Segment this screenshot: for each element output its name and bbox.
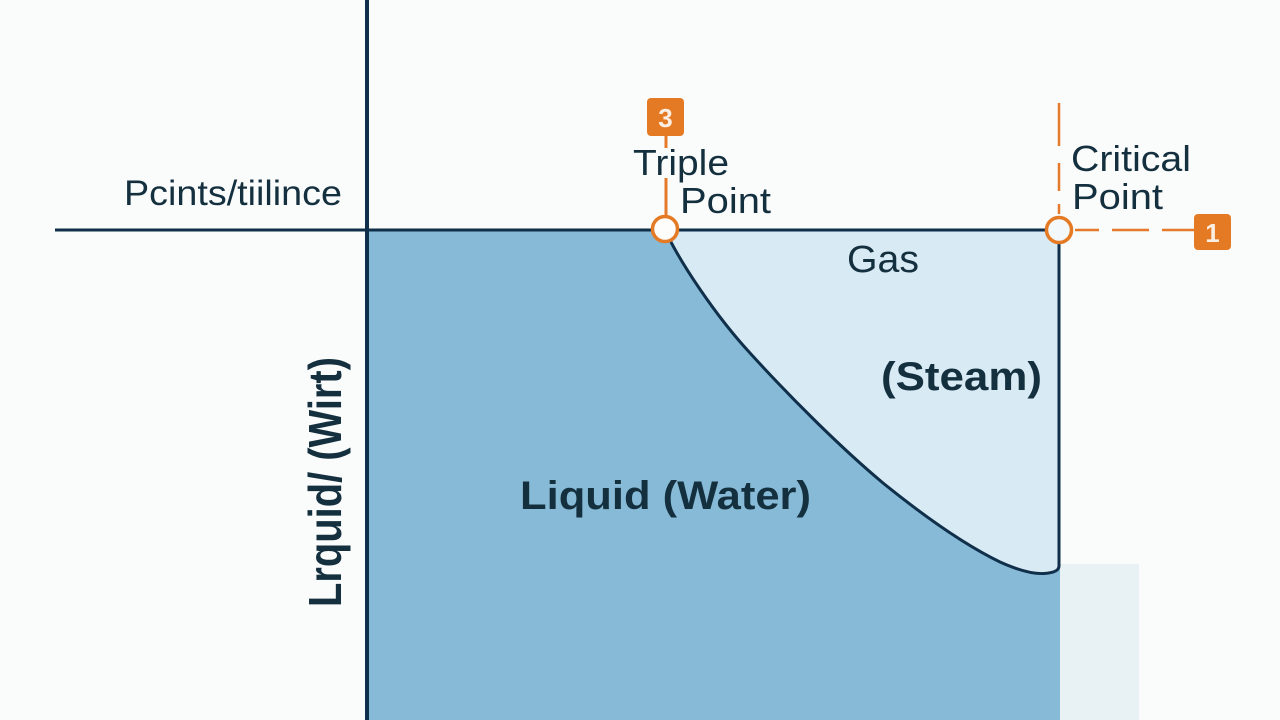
region: liquid xyxy=(367,230,1060,720)
phase boundary curve xyxy=(666,230,1059,574)
label: critical point: Critical xyxy=(1071,138,1191,179)
pale panel: lower right xyxy=(1060,564,1139,720)
axis label: horizontal: Pcints/tiilince xyxy=(124,174,342,213)
label: triple point: Point xyxy=(680,180,771,221)
label: gas: Gas xyxy=(847,239,919,281)
region: gas xyxy=(666,230,1059,574)
label: critical point: Point xyxy=(1072,176,1163,217)
label: steam: (Steam) xyxy=(881,355,1042,399)
critical point dashed leaders xyxy=(1059,103,1195,230)
badge: 3 xyxy=(647,98,684,136)
triple point marker xyxy=(647,98,684,242)
critical point marker xyxy=(1046,103,1231,250)
label: liquid water: Liquid (Water) xyxy=(520,474,811,518)
triple point circle xyxy=(652,216,678,242)
critical point circle xyxy=(1046,218,1072,242)
label: triple point: Triple xyxy=(633,142,729,183)
badge: 3: 3 xyxy=(658,103,673,133)
horizontal axis xyxy=(55,228,1059,232)
triple point leader line xyxy=(664,136,668,216)
label: critical point xyxy=(1071,138,1191,217)
label: triple point xyxy=(633,142,771,221)
vertical axis xyxy=(365,0,369,720)
badge: 1 xyxy=(1194,214,1231,250)
axis label: vertical: Lrquid/ (Wirt) xyxy=(299,357,351,607)
badge: 1: 1 xyxy=(1205,218,1220,248)
